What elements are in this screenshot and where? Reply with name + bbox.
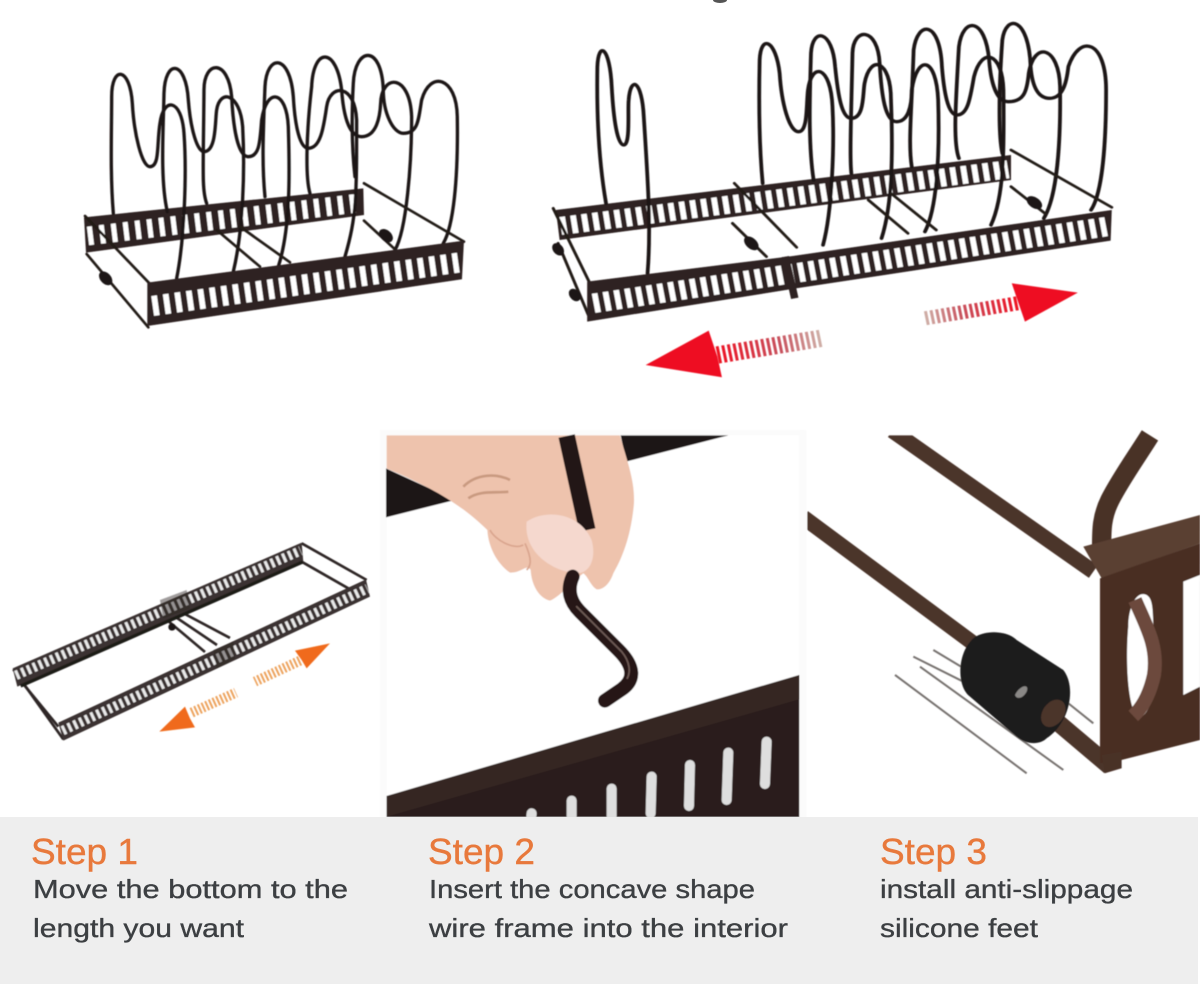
bracket end plate (1083, 515, 1200, 773)
upright wire (1102, 435, 1150, 547)
step 1 caption: length you want (33, 913, 245, 943)
step 3 caption (880, 831, 1133, 943)
step 2 image: hand inserting wire hook (380, 430, 805, 823)
arrow: orange right (255, 643, 330, 682)
arrow: orange left (159, 693, 236, 732)
panel frame (800, 430, 807, 820)
silicone cap (960, 632, 1071, 743)
slider knob (168, 623, 176, 631)
back panel (84, 188, 364, 253)
motion lines (895, 650, 1093, 773)
step 2 caption: wire frame into the interior (428, 913, 788, 943)
step 2 caption: Step 2 (428, 831, 535, 872)
step 2 caption (428, 831, 788, 943)
rubber feet (96, 226, 395, 288)
rack rail close-up (387, 675, 799, 823)
step 1 caption (31, 831, 348, 943)
rubber feet (550, 194, 1045, 303)
step 3 caption: install anti-slippage (880, 874, 1133, 904)
step 1 caption: Move the bottom to the (33, 874, 348, 904)
front panel (587, 210, 1112, 322)
back rail (13, 543, 303, 687)
frame rods (13, 543, 367, 739)
wire rod in fingers (567, 436, 587, 530)
step 2 caption: Insert the concave shape (429, 874, 755, 904)
dark rack bars (386, 435, 728, 517)
caption band (0, 817, 1198, 984)
front panel (147, 241, 464, 326)
step 1 caption: Step 1 (31, 831, 138, 872)
panel frame (380, 430, 805, 820)
arrow: red right (925, 283, 1078, 322)
step 1 image: expanded base frame (13, 543, 370, 741)
front rail (58, 579, 370, 741)
pan divider wires (597, 23, 1106, 273)
frame rods (85, 183, 464, 327)
cropped heading remnant (713, 0, 727, 3)
rods (803, 431, 1110, 767)
back panel (556, 155, 1011, 240)
step 3 caption: Step 3 (880, 831, 987, 872)
pan divider wires (111, 55, 457, 278)
arrow: red left (646, 331, 821, 377)
rail joints (160, 590, 235, 668)
product image: extended rack (550, 23, 1112, 377)
thumb (526, 515, 593, 573)
step 3 image: silicone foot close-up (800, 430, 1200, 820)
step 3 caption: silicone feet (880, 913, 1039, 943)
product image: compact rack (84, 55, 464, 327)
wire hook (570, 577, 631, 701)
frame rods (553, 150, 1112, 315)
hand (387, 435, 634, 601)
